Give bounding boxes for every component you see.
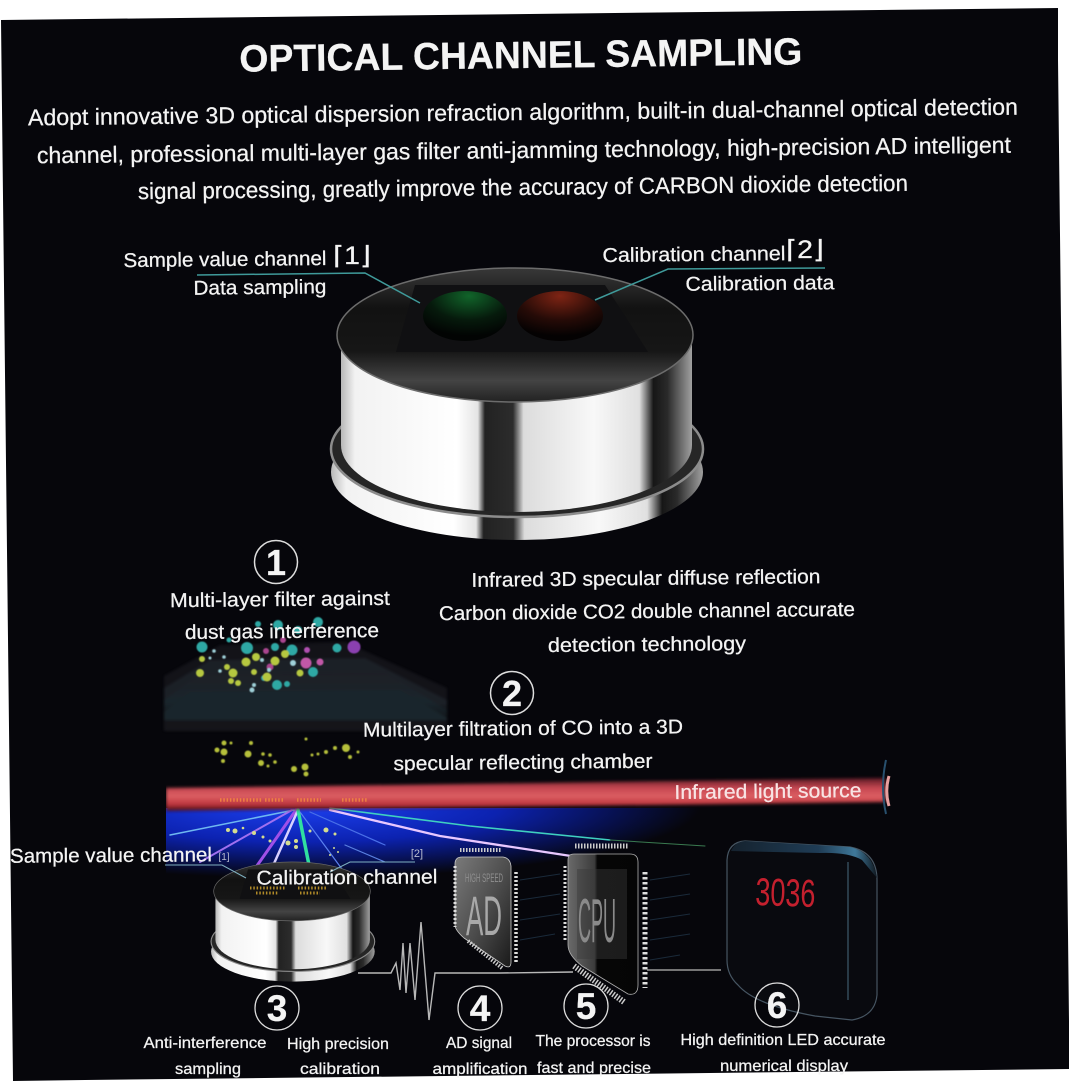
gas particles xyxy=(196,617,360,692)
calibration channel small label: [2] xyxy=(411,848,423,860)
particles in chamber xyxy=(226,827,339,856)
title: OPTICAL CHANNEL SAMPLING xyxy=(239,31,803,81)
LED readout: 3036 xyxy=(755,871,816,916)
step 3 right caption: High precision xyxy=(287,1036,389,1053)
callout: calibration channel 2: Calibration data xyxy=(685,272,835,296)
step 3 left caption xyxy=(144,1035,267,1078)
step 4 caption: amplification xyxy=(432,1061,528,1078)
callout: sample value channel 1: Sample value channel xyxy=(123,248,327,272)
red calibration window xyxy=(517,291,603,341)
channel leader lines xyxy=(165,862,415,878)
step 4 badge xyxy=(458,986,502,1030)
device top highlight xyxy=(731,841,877,878)
step 1 label: Multi-layer filter against xyxy=(170,588,391,612)
text: infrared 3D reflection heading xyxy=(439,566,855,657)
step 5 caption: fast and precise xyxy=(537,1060,651,1077)
step 5 badge: 5 xyxy=(576,986,596,1027)
step 3 right caption: calibration xyxy=(300,1061,380,1078)
step 6 caption xyxy=(680,1032,886,1075)
step 5 caption: The processor is xyxy=(536,1033,650,1050)
step 1 badge xyxy=(254,540,298,584)
step 6 caption: High definition LED accurate xyxy=(680,1032,886,1049)
step 3 left caption: Anti-interference xyxy=(144,1035,267,1052)
step 2 badge xyxy=(490,672,534,714)
green sample window xyxy=(423,291,507,341)
text: infrared 3D reflection heading: detection technology xyxy=(548,633,746,657)
callout: sample value channel 1: ⌈1⌋ xyxy=(333,242,371,270)
step 1 label: dust gas interference xyxy=(185,620,379,644)
LED display device xyxy=(727,841,877,1020)
step 6 badge xyxy=(755,983,799,1027)
step 1 label xyxy=(170,588,391,644)
text: infrared 3D reflection heading: Carbon dioxide CO2 double channel accurate xyxy=(439,599,855,625)
infrared beam xyxy=(160,760,889,816)
CPU chip xyxy=(565,846,690,1002)
step 4 caption xyxy=(432,1035,528,1078)
gold particles in sensor xyxy=(250,888,326,893)
step 2 badge: 2 xyxy=(502,673,522,714)
step 5 caption xyxy=(536,1033,651,1077)
step 3 badge: 3 xyxy=(267,988,287,1029)
step 3 right caption xyxy=(287,1036,389,1078)
beam label: Infrared light source xyxy=(674,780,862,804)
connector line to display xyxy=(647,969,721,971)
callout: sample value channel 1: Data sampling xyxy=(193,276,327,300)
chip traces xyxy=(520,874,560,940)
infrared emitter xyxy=(883,760,889,814)
step 3 left caption: sampling xyxy=(175,1061,241,1078)
CPU pins xyxy=(564,866,566,942)
chip text: HIGH SPEED xyxy=(465,871,503,885)
intro paragraph: channel, professional multi-layer gas filter anti-jamming technology, high-precision AD intelligent xyxy=(37,132,1012,168)
callout: calibration channel 2: ⌈2⌋ xyxy=(786,236,824,264)
step 5 badge xyxy=(564,984,608,1028)
AD chip: AD xyxy=(466,884,502,947)
calibration channel small label: Calibration channel xyxy=(256,866,438,890)
orange particles on beam xyxy=(220,798,368,802)
intro paragraph: Adopt innovative 3D optical dispersion refraction algorithm, built-in dual-channel optical detection xyxy=(28,94,1018,130)
step 2 label: Multilayer filtration of CO into a 3D xyxy=(363,716,683,742)
callout: sample value channel 1 xyxy=(123,242,420,303)
CPU chip: CPU xyxy=(578,887,616,956)
step 4 caption: AD signal xyxy=(446,1035,512,1052)
AD chip xyxy=(455,850,560,968)
light rays xyxy=(170,808,705,890)
filter layers xyxy=(164,642,447,731)
text: infrared 3D reflection heading: Infrared 3D specular diffuse reflection xyxy=(471,566,821,592)
sample value channel small label: [1] xyxy=(218,852,230,863)
step 3 badge xyxy=(255,986,299,1030)
chip pins xyxy=(454,866,456,927)
sample value channel small label: Sample value channel xyxy=(10,844,212,868)
large sensor illustration xyxy=(331,268,703,540)
callout: calibration channel 2 xyxy=(595,236,835,300)
step 6 badge: 6 xyxy=(767,985,787,1026)
CPU traces xyxy=(650,874,690,960)
intro paragraph xyxy=(28,94,1018,204)
step 2 label: specular reflecting chamber xyxy=(393,751,653,775)
step 4 badge: 4 xyxy=(470,988,491,1029)
calibration channel small label xyxy=(256,848,438,890)
intro paragraph: signal processing, greatly improve the accuracy of CARBON dioxide detection xyxy=(138,170,908,204)
callout: calibration channel 2: Calibration channel xyxy=(602,243,786,267)
small sensor illustration xyxy=(211,862,375,982)
yellow filtered particles xyxy=(214,738,360,776)
step 2 label xyxy=(363,716,683,775)
blue reflection chamber xyxy=(166,808,706,890)
step 1 badge: 1 xyxy=(266,542,286,583)
step 6 caption: numerical display xyxy=(720,1058,848,1075)
signal waveform xyxy=(358,922,573,1020)
CPU inner die xyxy=(577,869,627,959)
